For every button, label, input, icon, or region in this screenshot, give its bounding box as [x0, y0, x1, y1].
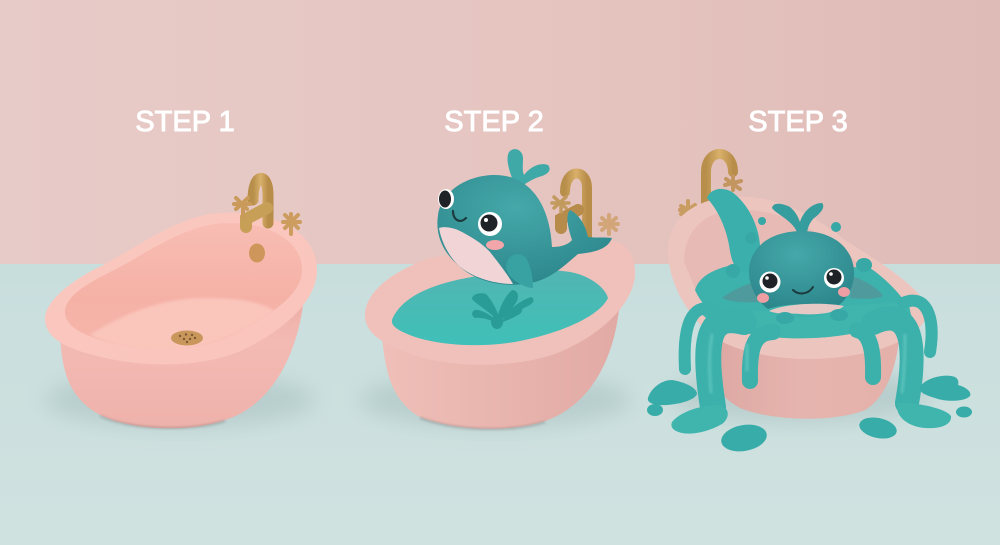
step 2: tub with water and jumping whale [365, 149, 635, 429]
heading: step 2: STEP 2 [444, 106, 544, 138]
tub contact shadow [100, 416, 225, 428]
droplets [726, 217, 872, 324]
faucet [246, 178, 268, 227]
step 1: empty bathtub [45, 178, 317, 428]
tub rim [668, 196, 927, 359]
tub body [60, 305, 303, 428]
right tap [283, 214, 300, 234]
whale cheeks [757, 287, 850, 303]
step 3: overflowing tub [647, 154, 972, 455]
background wall [0, 0, 1000, 265]
water splash [472, 290, 534, 329]
goo drips [685, 301, 932, 407]
whale far eye [438, 189, 454, 209]
water surface [392, 270, 608, 345]
whale flipper [506, 254, 533, 288]
tub contact shadow [420, 418, 545, 429]
water column from faucet [707, 189, 760, 273]
whale body and tail [437, 175, 612, 285]
whale right eye [824, 268, 844, 288]
whale spout [508, 149, 550, 186]
heading: step 1: STEP 1 [135, 106, 235, 138]
foot puddles [671, 405, 728, 434]
whale spout [772, 203, 823, 232]
whale belly [439, 227, 513, 284]
puddles [647, 376, 972, 455]
whale fins [722, 276, 883, 302]
pool on rim [698, 300, 912, 338]
tub interior [65, 223, 302, 349]
whale wink [453, 211, 466, 221]
drain [171, 330, 203, 346]
tub body [382, 310, 619, 429]
whale [437, 149, 612, 288]
tub floor [90, 298, 275, 353]
whale body [749, 231, 854, 309]
whale [722, 203, 883, 314]
water surface [695, 262, 905, 338]
whale smile [793, 287, 813, 293]
goo highlights [710, 335, 905, 392]
faucet [680, 154, 741, 219]
whale near eye [478, 212, 502, 236]
faucet behind whale [552, 173, 618, 250]
tub rim [45, 213, 317, 364]
whale cheek [486, 240, 504, 250]
overflowing goo [671, 300, 951, 434]
tub interior [684, 210, 905, 330]
tub body [700, 330, 900, 419]
floor shadows [45, 367, 930, 428]
heading: step 3: STEP 3 [748, 106, 848, 138]
background floor [0, 264, 1000, 545]
whale belly [769, 304, 844, 314]
whale left eye [760, 272, 780, 292]
overflow plug [249, 244, 265, 262]
tub rim [365, 240, 635, 365]
left tap [234, 198, 250, 217]
